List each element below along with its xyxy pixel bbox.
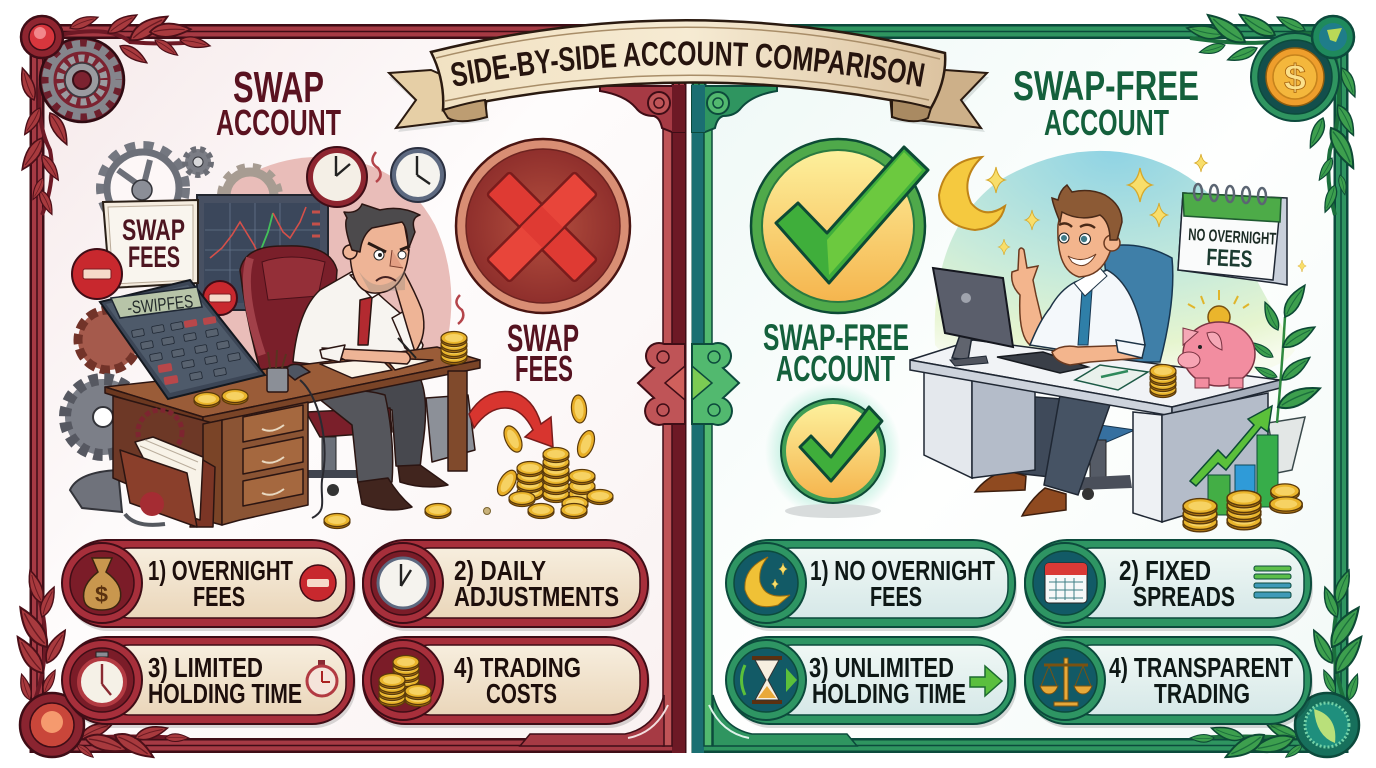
icon: big red X medallion xyxy=(456,139,630,313)
clock red xyxy=(307,147,367,207)
pink backdrop circle xyxy=(205,157,451,370)
card: 1 no overnight fees: FEES xyxy=(870,581,922,612)
label: SWAP-FREE ACCOUNT xyxy=(763,317,909,389)
label: SWAP-FREE ACCOUNT: SWAP-FREE xyxy=(763,317,909,358)
card: 4 trading costs: COSTS xyxy=(486,678,557,709)
card: 1 overnight fees: 1) OVERNIGHT xyxy=(148,555,293,586)
icon: alarm clock xyxy=(79,652,125,705)
icon: moon and stars xyxy=(745,557,790,607)
panel: swap account frame xyxy=(37,32,685,753)
icon: minus sign xyxy=(300,565,336,601)
card: 2 daily adjustments: ADJUSTMENTS xyxy=(454,581,619,612)
label: SWAP FEES: SWAP xyxy=(507,318,579,360)
card: 1 overnight fees xyxy=(62,540,356,631)
illustration: happy trader at desk xyxy=(910,151,1323,532)
icon: clock xyxy=(378,558,428,608)
heading: SWAP-FREE ACCOUNT xyxy=(1013,62,1199,143)
label: SWAP FEES xyxy=(507,318,579,389)
computer monitor xyxy=(933,268,1013,366)
card: 3 unlimited holding time: 3) UNLIMITED xyxy=(809,652,954,683)
card: 1 no overnight fees: 1) NO OVERNIGHT xyxy=(810,555,995,586)
icon: money bag xyxy=(84,558,121,610)
card: 4 transparent trading xyxy=(1025,637,1313,728)
icon: money bag: $ xyxy=(95,582,108,607)
desk xyxy=(105,347,480,525)
icon: spread bars xyxy=(1254,566,1291,598)
SWAP FEES sign: FEES xyxy=(128,241,180,274)
title ribbon xyxy=(386,19,990,132)
coin pile xyxy=(494,394,613,518)
desk coin stack xyxy=(1150,364,1176,398)
card: 4 transparent trading: 4) TRANSPARENT xyxy=(1109,652,1293,683)
calculator xyxy=(100,280,265,399)
chart monitor xyxy=(197,195,328,310)
icon: stopwatch xyxy=(307,660,337,696)
sky backdrop xyxy=(935,151,1295,380)
forearm, keyboard and notepad xyxy=(997,340,1148,390)
desk xyxy=(910,340,1280,522)
trader xyxy=(1012,185,1145,358)
coins by the desk xyxy=(1183,484,1302,532)
heading: SWAP-FREE ACCOUNT: SWAP-FREE xyxy=(1013,62,1199,109)
trousers and shoes xyxy=(306,378,448,510)
icon: calendar xyxy=(1045,563,1087,603)
card: 2 fixed spreads: SPREADS xyxy=(1133,581,1235,612)
paperwork, mug and forearm xyxy=(267,338,433,518)
heading: SWAP ACCOUNT xyxy=(216,63,341,143)
growth bars and arrow xyxy=(1190,406,1278,515)
icon: balance scales xyxy=(1040,658,1092,706)
clock blue xyxy=(391,148,445,202)
office chair xyxy=(1030,245,1173,500)
card: 2 daily adjustments xyxy=(363,540,650,631)
calendar: no overnight fees xyxy=(1178,184,1287,285)
illustration: stressed trader at desk xyxy=(65,146,490,528)
icon: green arrow xyxy=(970,666,1002,696)
top-right ornament: gold dollar coin, gem and leaves: $ xyxy=(1284,57,1306,98)
chair xyxy=(240,246,383,496)
top-right ornament: gold dollar coin, gem and leaves xyxy=(1186,9,1360,215)
panel: swap-free account frame xyxy=(692,32,1341,753)
sparkles xyxy=(987,154,1306,272)
card: 1 overnight fees: FEES xyxy=(193,581,245,612)
heading: SWAP ACCOUNT: ACCOUNT xyxy=(216,102,341,143)
card: 3 limited holding time: 3) LIMITED xyxy=(148,652,263,683)
folder with papers xyxy=(120,437,215,527)
top-left ornament: gem, gear and leaves xyxy=(17,10,211,216)
calendar: no overnight fees: FEES xyxy=(1206,244,1253,273)
SWAP FEES sign: SWAP xyxy=(122,214,185,247)
piggy bank xyxy=(1178,290,1255,388)
icon: small glowing check xyxy=(765,383,901,519)
label: SWAP-FREE ACCOUNT: ACCOUNT xyxy=(776,348,895,389)
crescent moon xyxy=(939,157,1005,230)
card: 3 unlimited holding time xyxy=(726,637,1017,728)
heading: SWAP ACCOUNT: SWAP xyxy=(233,63,324,112)
arrow: fees flowing to coins xyxy=(469,391,553,447)
card: 4 trading costs xyxy=(363,637,650,728)
trousers and shoes xyxy=(975,395,1111,516)
card: 4 transparent trading: TRADING xyxy=(1154,678,1250,709)
trader torso and head xyxy=(293,204,424,366)
bottom-left ornament: red gem and leaves xyxy=(11,568,189,763)
bottom-right ornament: green gem and leaves xyxy=(1190,568,1367,764)
coins on and around the desk xyxy=(194,332,490,528)
icon: hourglass xyxy=(742,658,797,702)
icon: green check medallion xyxy=(751,139,928,313)
wastebin xyxy=(426,395,475,462)
SWAP FEES sign xyxy=(103,200,198,288)
stress squiggles xyxy=(372,152,463,324)
card: 2 daily adjustments: 2) DAILY xyxy=(454,555,546,586)
calendar: no overnight fees: NO OVERNIGHT xyxy=(1188,225,1277,249)
background gears xyxy=(65,146,280,525)
label: SWAP FEES: FEES xyxy=(515,348,573,389)
plant in pot xyxy=(1249,282,1323,473)
no-entry icons xyxy=(72,249,237,315)
calculator: -SWIPFES xyxy=(126,291,194,318)
card: 2 fixed spreads: 2) FIXED xyxy=(1119,555,1211,586)
card: 3 unlimited holding time: HOLDING TIME xyxy=(812,678,966,709)
card: 3 limited holding time xyxy=(62,637,356,728)
heading: SWAP-FREE ACCOUNT: ACCOUNT xyxy=(1044,102,1169,143)
title ribbon: SIDE-BY-SIDE ACCOUNT COMPARISON xyxy=(451,41,925,87)
card: 4 trading costs: 4) TRADING xyxy=(454,652,581,683)
card: 1 no overnight fees xyxy=(726,540,1017,631)
card: 3 limited holding time: HOLDING TIME xyxy=(148,678,302,709)
icon: coin stacks xyxy=(379,656,431,706)
card: 2 fixed spreads xyxy=(1025,540,1313,631)
